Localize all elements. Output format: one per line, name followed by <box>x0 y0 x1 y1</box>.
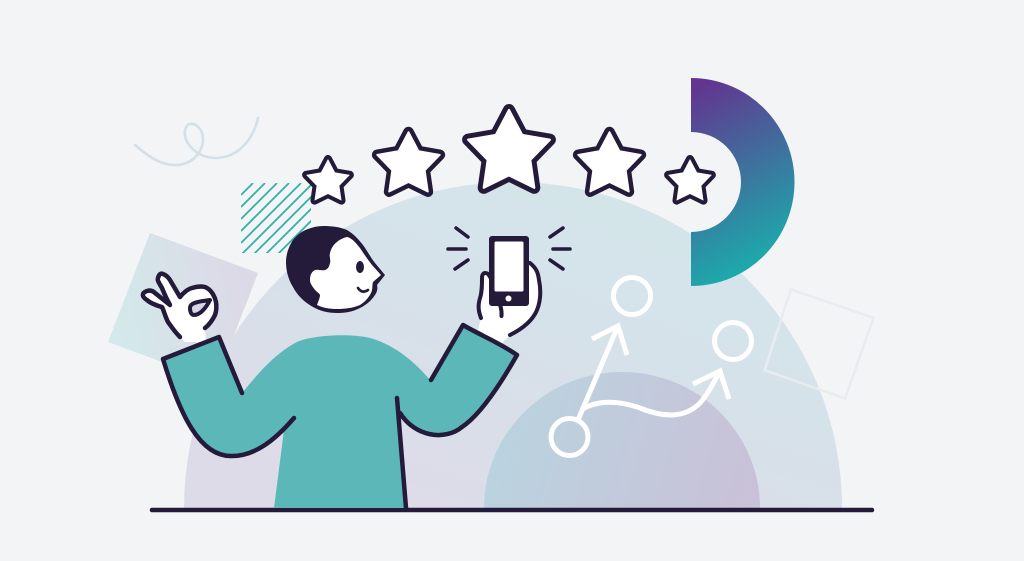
lavender square <box>108 233 258 382</box>
node circles <box>551 278 752 456</box>
curved arrow <box>581 371 729 415</box>
head <box>286 226 385 313</box>
star 1 <box>306 159 350 201</box>
smile <box>358 288 368 292</box>
decorative squiggle <box>135 118 258 165</box>
star 4 <box>578 132 641 192</box>
five stars <box>306 110 712 201</box>
phone signal rays <box>448 228 570 269</box>
small dome <box>484 372 760 508</box>
gradient half ring <box>691 78 794 286</box>
straight arrow <box>578 326 627 420</box>
person <box>143 226 570 508</box>
outlined square <box>763 288 875 400</box>
hatched square <box>241 183 311 253</box>
torso and arms <box>163 325 517 508</box>
ground line <box>152 508 872 512</box>
illustration: customer rating scene <box>108 78 875 512</box>
phone <box>489 236 529 306</box>
star 2 <box>377 132 440 192</box>
star 5 <box>668 159 712 201</box>
large dome <box>184 182 842 508</box>
eye <box>356 261 364 273</box>
star 3 <box>468 110 550 188</box>
right hand holding phone <box>478 236 540 345</box>
left hand ok gesture <box>143 274 216 342</box>
path diagram with arrows <box>551 278 752 456</box>
